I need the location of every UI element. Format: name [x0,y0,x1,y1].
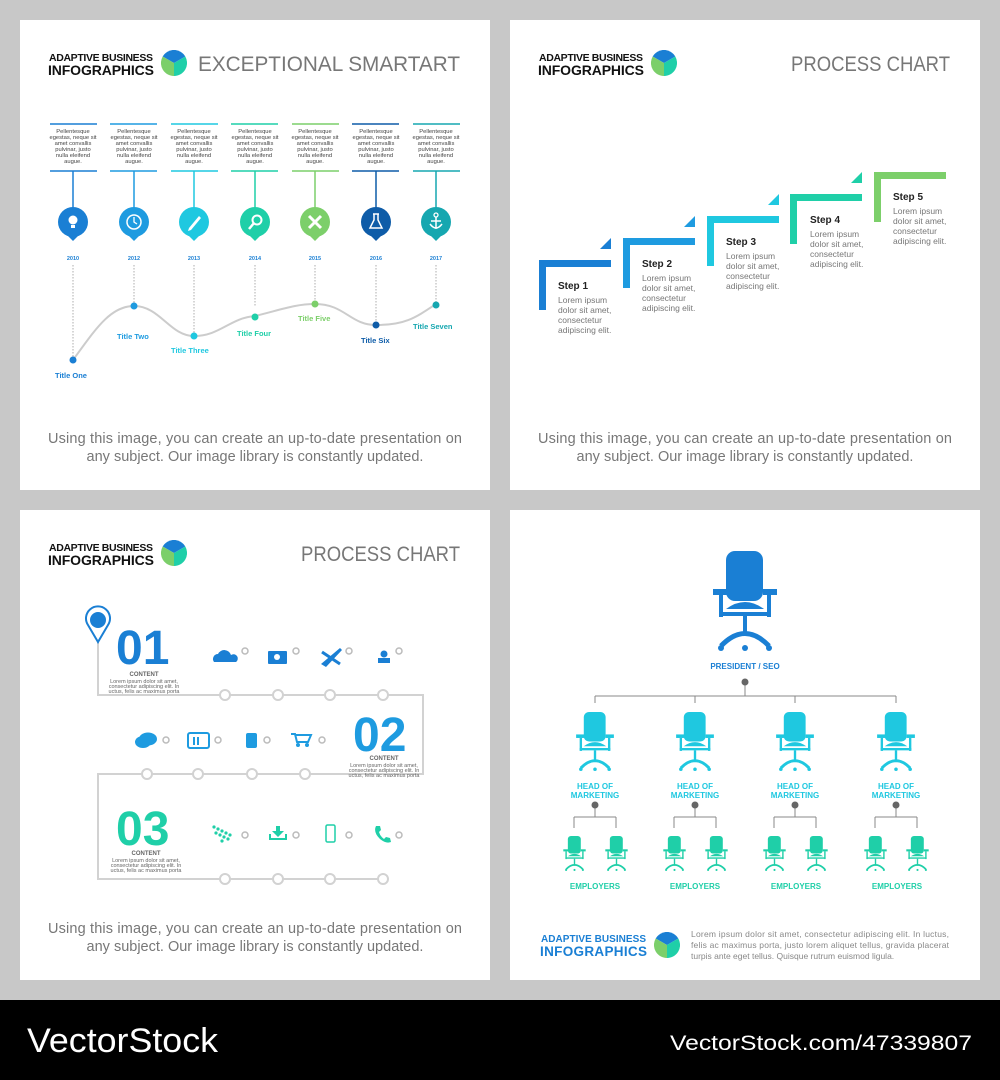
step texts: Step 2 [642,259,672,270]
header logo: INFOGRAPHICS [538,62,644,78]
point titles: Title Five [298,314,330,323]
timeline columns: amet convallis [358,141,394,147]
step texts: dolor sit amet, [810,239,863,249]
step texts: adipiscing elit. [893,236,946,246]
path nodes [142,690,388,884]
header logo [48,540,187,568]
step texts: Step 4 [810,215,840,226]
step texts: dolor sit amet, [893,216,946,226]
president chair [713,551,777,651]
timeline columns: nulla eleifend [56,153,90,159]
timeline columns: Pellentesque [419,129,453,135]
step texts: Step 3 [726,237,756,248]
watermark band: VectorStock [27,1022,219,1060]
footer logo: INFOGRAPHICS [540,944,647,959]
step texts [558,192,946,335]
header logo [538,50,677,78]
timeline columns: amet convallis [55,141,91,147]
timeline columns: pulvinar, justo [418,147,454,153]
dotted guides [73,265,436,358]
step texts: Lorem ipsum [726,251,775,261]
panel: process chart steps [510,20,980,490]
timeline columns: nulla eleifend [298,153,332,159]
employer chairs [563,836,929,871]
step texts: consectetur [558,315,602,325]
years: 2012 [128,256,140,262]
timeline columns: egestas, neque sit [412,135,460,141]
step texts: Step 5 [893,192,923,203]
timeline columns: amet convallis [237,141,273,147]
timeline columns: nulla eleifend [117,153,151,159]
panel: org chart: HEAD OF [677,782,713,791]
footer logo: ADAPTIVE BUSINESS [541,934,646,945]
panel: org chart: EMPLOYERS [872,882,923,891]
timeline columns: egestas, neque sit [231,135,279,141]
numbers and content: 03 [116,803,169,856]
curve chart [73,304,436,360]
small plus circles [163,648,402,838]
step texts: consectetur [642,293,686,303]
caption: Using this image, you can create an up-to-date presentation on [48,431,462,447]
caption [538,431,952,465]
years: 2013 [188,256,200,262]
timeline columns: augue. [367,159,385,165]
timeline columns: augue. [306,159,324,165]
pin icon [86,606,110,642]
timeline columns: augue. [185,159,203,165]
icons row 1 [213,648,390,667]
panel: process chart path: Lorem ipsum dolor sit amet, [350,763,418,769]
point titles [55,314,453,380]
step texts: dolor sit amet, [558,305,611,315]
timeline columns: Pellentesque [298,129,332,135]
icons in circles [68,213,442,231]
header logo [48,50,187,78]
timeline columns: Pellentesque [56,129,90,135]
watermark band: VectorStock.com/47339807 [670,1032,972,1055]
caption: Using this image, you can create an up-to-date presentation on [538,431,952,447]
footer text: felis ac maximus porta, justo lorem aliquet tellus, gravida placerat [691,940,950,950]
panel: org chart: PRESIDENT / SEO [710,662,780,671]
panel: process chart path [20,510,490,980]
timeline columns: amet convallis [176,141,212,147]
steps [539,172,946,310]
timeline columns: nulla eleifend [359,153,393,159]
timeline columns: Pellentesque [117,129,151,135]
timeline columns: augue. [64,159,82,165]
footer text: Lorem ipsum dolor sit amet, consectetur adipiscing elit. In luctus, [691,929,949,939]
icons row 3 [212,825,391,843]
header logo: ADAPTIVE BUSINESS [539,52,643,64]
panel: process chart path: CONTENT [130,672,159,678]
caption [48,431,462,465]
header logo: ADAPTIVE BUSINESS [49,542,153,554]
timeline columns: pulvinar, justo [297,147,333,153]
step texts: Lorem ipsum [893,206,942,216]
panel: process chart path: uctus, felis ac maximus porta [349,773,420,779]
path line [98,640,423,879]
years: 2010 [67,256,79,262]
point titles: Title Three [171,346,209,355]
timeline columns: nulla eleifend [419,153,453,159]
panel: process chart path: uctus, felis ac maximus porta [111,868,182,874]
panel: org chart: HEAD OF [577,782,613,791]
icons row 2 [135,732,311,748]
step texts: dolor sit amet, [642,283,695,293]
years: 2017 [430,256,442,262]
panel: process chart path: CONTENT [132,851,161,857]
step texts: Lorem ipsum [810,229,859,239]
timeline columns: egestas, neque sit [291,135,339,141]
timeline columns: nulla eleifend [238,153,272,159]
years: 2016 [370,256,382,262]
head chairs [576,712,915,771]
title: PROCESS CHART [301,543,460,566]
step texts: consectetur [893,226,937,236]
timeline columns: pulvinar, justo [176,147,212,153]
panel: process chart path: consectetur adipiscing elit. In [349,768,419,774]
step texts: consectetur [726,271,770,281]
timeline columns: augue. [427,159,445,165]
timeline columns: egestas, neque sit [49,135,97,141]
panel: exceptional smartart timeline [20,20,490,490]
timeline columns: augue. [246,159,264,165]
watermark band [0,1000,1000,1080]
point titles: Title Four [237,329,271,338]
timeline columns: egestas, neque sit [170,135,218,141]
caption: any subject. Our image library is constantly updated. [577,449,913,465]
timeline columns: Pellentesque [238,129,272,135]
panel: process chart path: consectetur adipiscing elit. In [111,863,181,869]
panel: process chart path: consectetur adipiscing elit. In [109,684,179,690]
panel: org chart: HEAD OF [777,782,813,791]
title: EXCEPTIONAL SMARTART [198,53,460,76]
caption: any subject. Our image library is constantly updated. [87,449,423,465]
panel: org chart: EMPLOYERS [570,882,621,891]
timeline columns: amet convallis [116,141,152,147]
point titles: Title Six [361,336,390,345]
panel: org chart: EMPLOYERS [670,882,721,891]
header logo: INFOGRAPHICS [48,552,154,568]
caption: Using this image, you can create an up-to-date presentation on [48,921,462,937]
panel: process chart path: Lorem ipsum dolor sit amet, [112,858,180,864]
step texts: Lorem ipsum [558,295,607,305]
panel: process chart path: CONTENT [370,756,399,762]
panel: org chart: MARKETING [571,791,619,800]
step texts: Step 1 [558,281,588,292]
timeline columns: Pellentesque [359,129,393,135]
point titles: Title One [55,371,87,380]
point titles: Title Two [117,332,149,341]
timeline columns: amet convallis [418,141,454,147]
caption [48,921,462,955]
step texts: adipiscing elit. [642,303,695,313]
footer text [691,929,950,961]
numbers and content [116,622,406,856]
numbers and content: 02 [353,709,406,762]
panel: process chart path: uctus, felis ac maximus porta [109,689,180,695]
panel: org chart [510,510,980,980]
timeline columns: egestas, neque sit [110,135,158,141]
step texts: adipiscing elit. [810,259,863,269]
point titles: Title Seven [413,322,453,331]
timeline columns: amet convallis [297,141,333,147]
timeline columns: nulla eleifend [177,153,211,159]
numbers and content: 01 [116,622,169,675]
panel: org chart: HEAD OF [878,782,914,791]
step texts: Lorem ipsum [642,273,691,283]
timeline columns: pulvinar, justo [358,147,394,153]
connectors [574,682,917,828]
years: 2015 [309,256,321,262]
caption: any subject. Our image library is constantly updated. [87,939,423,955]
timeline columns: augue. [125,159,143,165]
years [67,256,442,262]
years: 2014 [249,256,262,262]
panel: process chart path: Lorem ipsum dolor sit amet, [110,679,178,685]
panel: org chart: EMPLOYERS [771,882,822,891]
footer logo [540,932,680,959]
step texts: consectetur [810,249,854,259]
header logo: INFOGRAPHICS [48,62,154,78]
timeline columns: Pellentesque [177,129,211,135]
title: PROCESS CHART [791,53,950,76]
timeline columns [49,124,460,241]
step texts: adipiscing elit. [558,325,611,335]
panel: org chart: MARKETING [671,791,719,800]
timeline columns: pulvinar, justo [116,147,152,153]
timeline columns: egestas, neque sit [352,135,400,141]
header logo: ADAPTIVE BUSINESS [49,52,153,64]
footer text: turpis ante eget tellus. Quisque rutrum euismod ligula. [691,951,894,961]
panel: org chart: MARKETING [771,791,819,800]
step texts: adipiscing elit. [726,281,779,291]
timeline columns: pulvinar, justo [55,147,91,153]
panel: org chart: MARKETING [872,791,920,800]
step texts: dolor sit amet, [726,261,779,271]
timeline columns: pulvinar, justo [237,147,273,153]
